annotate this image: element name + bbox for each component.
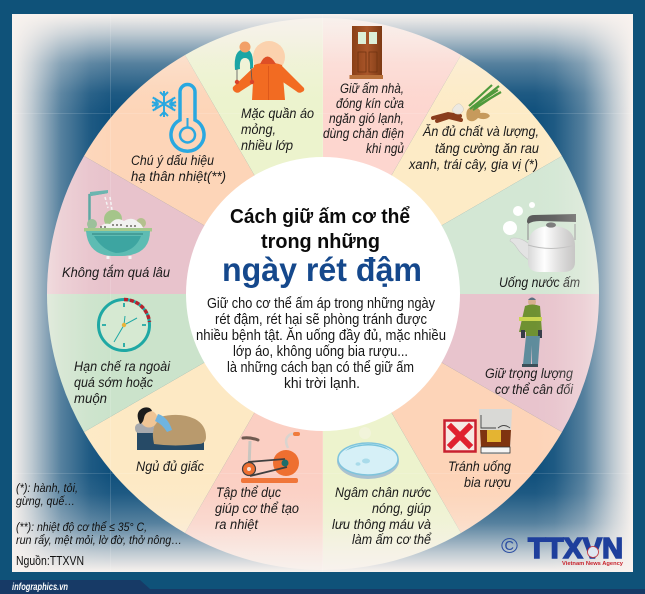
- icon: snowflake and thermometer: [152, 85, 204, 151]
- footer bar: infographics.vn: [12, 581, 68, 593]
- label: chú ý dấu hiệu: hạ thân nhiệt(**): [131, 169, 226, 184]
- icon: herbs and spices: [433, 85, 501, 121]
- footer bar: [0, 580, 645, 594]
- label: mặc quần áo: nhiều lớp: [241, 138, 293, 153]
- logo: TTXVN: Vietnam News Agency: [562, 561, 624, 567]
- label: ngủ đủ giấc: Ngủ đủ giấc: [136, 459, 204, 474]
- label: giữ ấm nhà: Giữ ấm nhà,: [340, 81, 404, 96]
- text block: introduction: lớp áo, không uống bia rượu...: [233, 344, 408, 360]
- label: tránh uống bia rượu: Tránh uống: [448, 459, 511, 474]
- heading: title: ngày rét đậm: [222, 251, 422, 288]
- panel: wheel of twelve tips: [47, 18, 599, 570]
- icon: bathtub: [84, 190, 152, 259]
- logo: TTXVN: ©: [501, 535, 519, 558]
- icon: sleeping person: [135, 407, 206, 450]
- text block: introduction: rét đậm, rét hại sẽ phòng tránh được: [215, 312, 427, 328]
- label: giữ trọng lượng: Giữ trọng lượng: [485, 366, 573, 381]
- logo: TTXVN: TTXVN: [528, 533, 623, 565]
- label: hạn chế ra ngoài: Hạn chế ra ngoài: [74, 359, 171, 374]
- text block: introduction: khi trời lạnh.: [284, 376, 360, 392]
- notes: (*): hành, tỏi,: [16, 481, 78, 495]
- source: Nguồn:TTXVN: [16, 554, 84, 568]
- text block: introduction: nhiều bệnh tật. Ăn uống đầy đủ, mặc nhiều: [196, 327, 446, 344]
- label: không tắm quá lâu: Không tắm quá lâu: [62, 265, 170, 280]
- icon: kettle: [503, 202, 576, 272]
- notes: run rẩy, mệt mỏi, lờ đờ, thở nông…: [16, 533, 182, 547]
- icon: door: [350, 26, 383, 79]
- icon: no alcohol: [444, 409, 512, 454]
- icon: clock: [98, 299, 150, 350]
- notes: (**): nhiệt độ cơ thể ≤ 35° C,: [16, 520, 147, 534]
- label: ăn đủ chất: tăng cường ăn rau: [435, 141, 539, 156]
- label: uống nước ấm: Uống nước ấm: [499, 275, 580, 290]
- label: ngâm chân nước: nóng, giúp: [372, 501, 431, 516]
- label: hạn chế ra ngoài: quá sớm hoặc: [74, 375, 153, 390]
- icon: exercise bike: [241, 432, 300, 483]
- label: ăn đủ chất: Ăn đủ chất và lượng,: [422, 124, 539, 139]
- label: ngâm chân nước: Ngâm chân nước: [335, 485, 431, 500]
- label: giữ ấm nhà: đóng kín cửa: [336, 96, 404, 111]
- label: hạn chế ra ngoài: muộn: [74, 391, 107, 406]
- notes: gừng, quế…: [16, 494, 75, 508]
- label: giữ ấm nhà: ngăn gió lạnh,: [329, 111, 404, 126]
- label: giữ trọng lượng: cơ thể cân đối: [495, 382, 574, 397]
- icon: man in green jacket: [519, 298, 542, 367]
- heading: title: Cách giữ ấm cơ thể: [230, 205, 410, 228]
- icon: foot bath bowl: [337, 427, 399, 479]
- label: giữ ấm nhà: dùng chăn điện: [323, 126, 404, 141]
- center white circle: [186, 157, 460, 431]
- notes: [16, 481, 182, 547]
- label: giữ ấm nhà: khi ngủ: [366, 141, 404, 156]
- heading: title: [222, 205, 422, 288]
- label: tránh uống bia rượu: bia rượu: [464, 475, 511, 490]
- label: mặc quần áo: mỏng,: [241, 122, 276, 137]
- heading: title: trong những: [261, 230, 380, 253]
- label: tập thể dục: Tập thể dục: [216, 485, 281, 500]
- label: tập thể dục: ra nhiệt: [215, 517, 259, 532]
- text block: introduction: là những cách bạn có thể giữ ấm: [227, 360, 414, 376]
- icon: winter coat and hat: [233, 41, 304, 100]
- label: ngâm chân nước: lưu thông máu và: [332, 517, 431, 532]
- label: ngâm chân nước: làm ấm cơ thể: [352, 532, 432, 547]
- label: chú ý dấu hiệu: Chú ý dấu hiệu: [131, 153, 214, 168]
- label: mặc quần áo: Mặc quần áo: [241, 106, 314, 121]
- text block: introduction: Giữ cho cơ thể ấm áp trong những ngày: [207, 296, 436, 312]
- label: ăn đủ chất: xanh, trái cây, gia vị (*): [408, 157, 538, 172]
- label: tập thể dục: giúp cơ thể tạo: [215, 501, 299, 516]
